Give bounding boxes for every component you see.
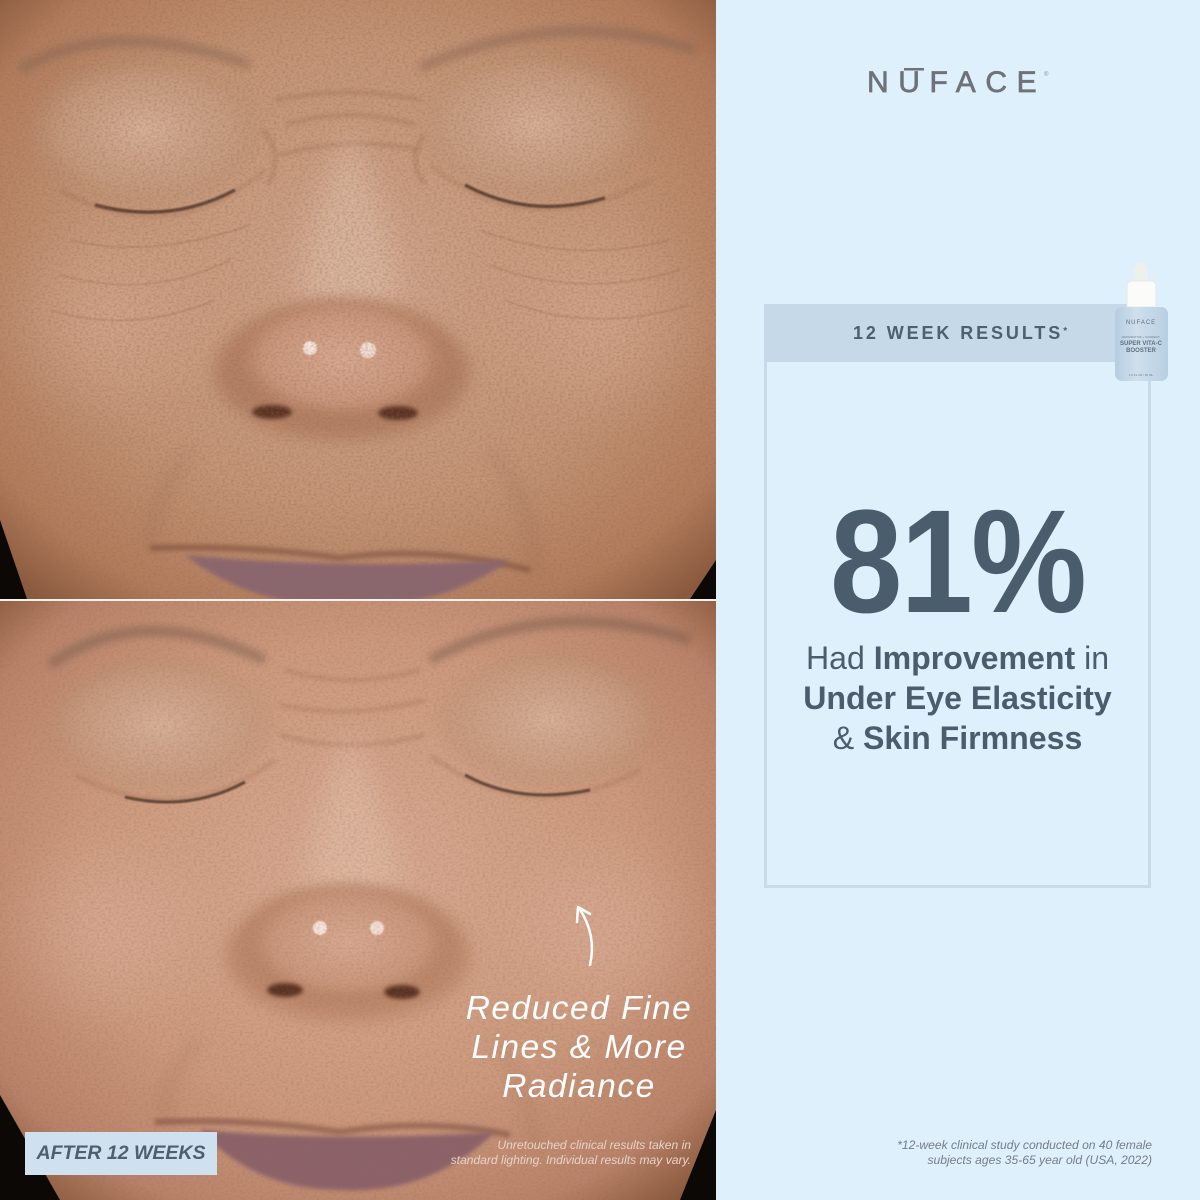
divider between photos	[0, 599, 716, 601]
text: improvement description: Under Eye Elasticity	[803, 680, 1112, 716]
stat: 81%: 81%	[830, 480, 1085, 644]
callout: reduced fine lines: Radiance	[502, 1068, 656, 1105]
text: improvement description	[803, 640, 1112, 756]
text: improvement description: & Skin Firmness	[833, 720, 1082, 756]
footnote: clinical study: subjects ages 35-65 year old (USA, 2022)	[927, 1153, 1152, 1167]
icon: serum bottle: NUFACE	[1126, 320, 1156, 326]
callout: reduced fine lines	[466, 990, 692, 1105]
panel header: 12 week results	[764, 304, 1151, 362]
text: improvement description: Had Improvement in	[806, 640, 1109, 676]
disclaimer: photo	[450, 1138, 691, 1167]
footnote: clinical study	[897, 1138, 1152, 1167]
label: after 12 weeks	[25, 1132, 217, 1175]
disclaimer: photo: standard lighting. Individual results may vary.	[451, 1153, 691, 1167]
photo: before, top face	[0, 0, 720, 606]
disclaimer: photo: Unretouched clinical results taken in	[497, 1138, 691, 1152]
footnote: clinical study: *12-week clinical study conducted on 40 female	[897, 1138, 1152, 1152]
photo: before and after faces	[0, 0, 716, 1200]
logo: NuFACE: ®	[1044, 71, 1049, 78]
panel header: 12 week results: 12 WEEK RESULTS*	[853, 323, 1067, 343]
icon: serum bottle	[1115, 262, 1168, 381]
icon: serum bottle: 1.0 FL OZ / 30 ML	[1129, 373, 1153, 377]
icon: serum bottle: REPAIRATIVE + CORRECT	[1122, 335, 1160, 339]
callout: reduced fine lines: Reduced Fine	[466, 990, 692, 1027]
icon: serum bottle: BOOSTER	[1126, 348, 1156, 354]
logo: NuFACE: NUFACE	[867, 66, 1046, 99]
icon: serum bottle: SUPER VITA-C	[1120, 341, 1163, 347]
callout: reduced fine lines: Lines & More	[471, 1029, 687, 1066]
photo: after, bottom face	[0, 601, 720, 1200]
icon: curved arrow	[577, 907, 592, 965]
label: after 12 weeks: AFTER 12 WEEKS	[36, 1142, 206, 1164]
panel: results frame	[764, 304, 1151, 888]
